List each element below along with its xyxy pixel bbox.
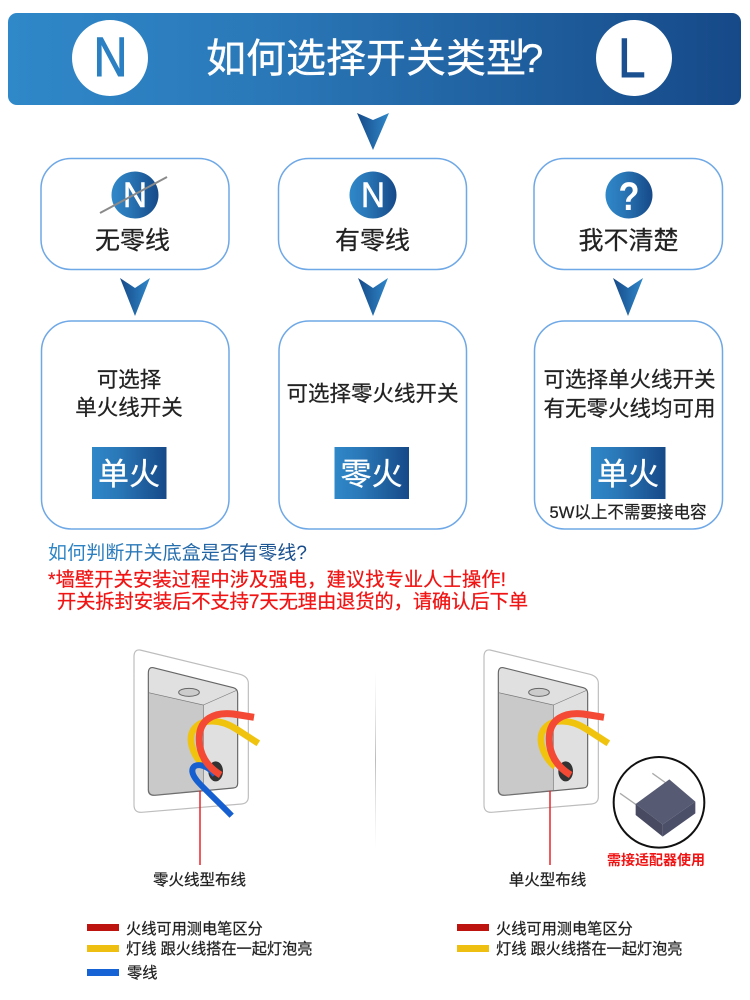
- legend item: lamp: 灯线 跟火线搭在一起灯泡亮: [496, 941, 682, 958]
- switch box: [148, 668, 238, 795]
- warning text line 1: *墙壁开关安装过程中涉及强电，建议找专业人士操作!: [48, 569, 506, 591]
- switch box: [498, 668, 588, 795]
- panel: unsure result: [534, 321, 722, 529]
- badge: single live: [92, 447, 166, 499]
- arrow: right: [613, 278, 643, 316]
- icon: question mark: ?: [618, 175, 640, 219]
- warning text line 2: 开关拆封安装后不支持7天无理由退货的，请确认后下单: [57, 591, 528, 613]
- badge: neutral live: 零火: [340, 457, 402, 492]
- text: 可选择: [97, 368, 161, 392]
- divider: [375, 670, 376, 850]
- wire: red: [549, 714, 604, 775]
- icon: crossed N: [100, 172, 167, 218]
- arrow: top: [357, 113, 389, 150]
- panel: not sure: [534, 158, 722, 270]
- label: 有零线: [335, 227, 410, 255]
- legend item: live: 火线可用测电笔区分: [126, 921, 263, 938]
- badge: single live: 单火: [98, 457, 160, 492]
- legend item: neutral: [87, 965, 157, 982]
- pointer line: [198, 791, 202, 865]
- arrow: left: [120, 278, 150, 316]
- wire: blue: [192, 765, 232, 816]
- badge: single live: 单火: [597, 457, 659, 492]
- panel: no neutral: [41, 158, 229, 270]
- pointer line: [548, 791, 552, 865]
- panel: has neutral: [278, 158, 466, 270]
- badge: neutral live: [334, 447, 409, 499]
- L badge: [596, 20, 672, 96]
- legend: right: [457, 921, 682, 958]
- text: 单火线开关: [75, 396, 183, 420]
- wire: yellow: [541, 721, 608, 767]
- icon: N: [350, 172, 396, 218]
- note: 5W以上不需要接电容: [550, 503, 706, 522]
- wall plate: [484, 650, 598, 812]
- text: 可选择单火线开关: [543, 368, 716, 392]
- wire: red: [199, 714, 254, 775]
- title: 如何选择开关类型: [206, 37, 526, 81]
- text: 可选择零火线开关: [286, 382, 459, 406]
- panel: neutral live result: [279, 321, 466, 529]
- capacitor caption: 需接适配器使用: [607, 852, 705, 868]
- icon: capacitor: [614, 757, 704, 848]
- diagram label: 单火型布线: [509, 871, 586, 889]
- diagram label: 零火线型布线: [153, 871, 246, 889]
- icon: question mark: [606, 172, 652, 219]
- icon: crossed N: N: [123, 176, 147, 215]
- N badge: N: [94, 25, 128, 88]
- legend item: neutral: 零线: [127, 965, 157, 982]
- label: 我不清楚: [578, 227, 679, 255]
- L badge: L: [618, 26, 646, 89]
- title: ?: [521, 37, 543, 81]
- label: 无零线: [95, 227, 170, 255]
- text: 有无零火线均可用: [543, 397, 716, 421]
- banner: [8, 13, 741, 105]
- diagram: neutral and live wiring: [134, 650, 258, 865]
- badge: single live: [591, 447, 666, 499]
- icon: N: N: [361, 176, 385, 215]
- legend item: lamp: 灯线 跟火线搭在一起灯泡亮: [126, 941, 312, 958]
- diagram: single live wiring: [484, 650, 608, 865]
- panel: single live result: [42, 321, 229, 529]
- legend: left: [87, 921, 312, 982]
- wire: yellow: [191, 721, 258, 767]
- arrow: middle: [358, 278, 388, 316]
- wall plate: [134, 650, 248, 812]
- question heading: 如何判断开关底盒是否有零线?: [48, 542, 307, 564]
- legend item: live: 火线可用测电笔区分: [496, 921, 633, 938]
- N badge: [72, 20, 148, 96]
